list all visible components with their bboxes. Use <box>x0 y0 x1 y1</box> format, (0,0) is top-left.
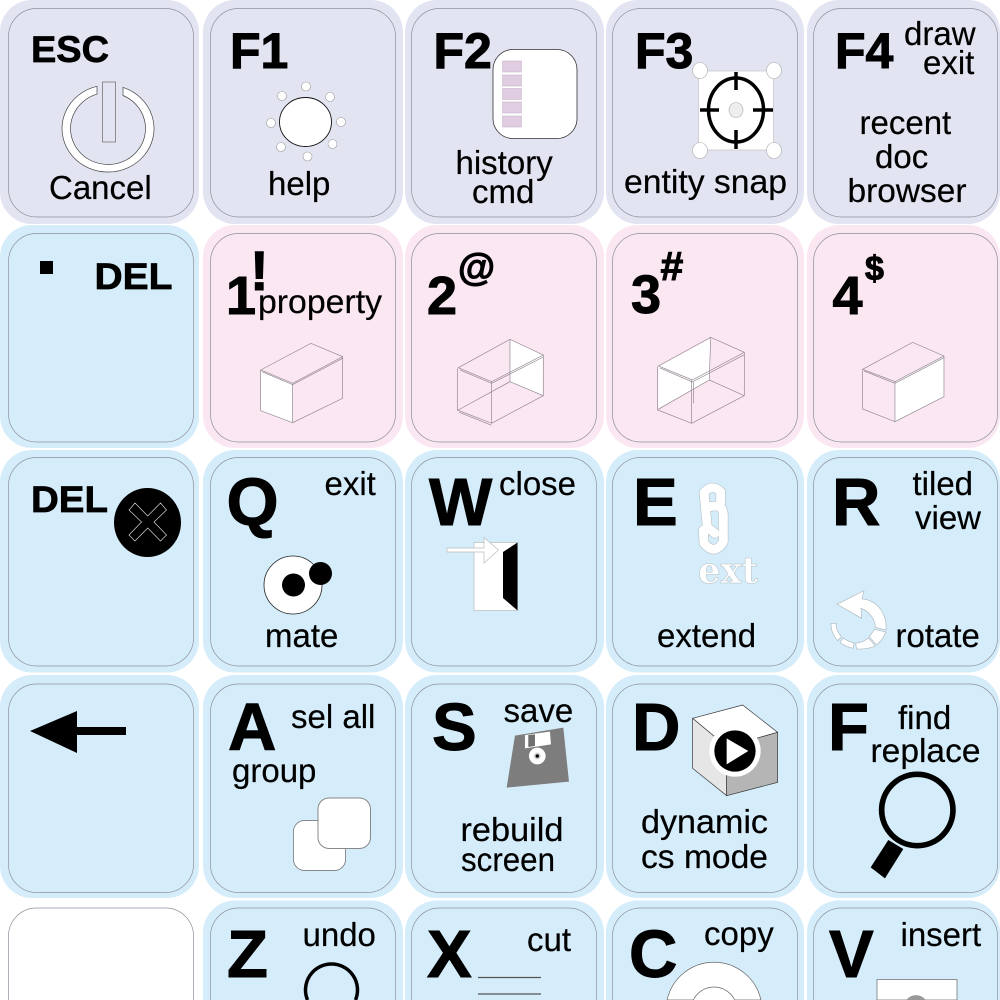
icon: paperclip <box>703 488 723 549</box>
key: C copy <box>606 900 804 1000</box>
label: view: view <box>915 499 981 536</box>
key: 4 dollar <box>807 225 1000 448</box>
icon: solid box, left face <box>261 343 343 423</box>
label: copy: copy <box>704 915 774 952</box>
icon: rotate arrow <box>831 591 886 649</box>
icon: overlapping squares <box>294 798 370 870</box>
key: D dynamic cs mode <box>606 675 804 898</box>
icon: clipboard sheet <box>877 980 957 1000</box>
label: find: find <box>898 699 951 736</box>
label: X: X <box>427 917 472 992</box>
label: exit: exit <box>324 465 376 502</box>
key: backspace <box>0 675 199 898</box>
label: W: W <box>429 465 493 540</box>
key: F2 history cmd <box>405 0 604 224</box>
label: entity snap: entity snap <box>624 163 787 200</box>
key: F find replace <box>807 675 1000 898</box>
label: exclamation mark: ! <box>250 239 269 302</box>
label: dollar: $ <box>865 250 884 288</box>
label: at sign: @ <box>458 247 495 289</box>
label: F2: F2 <box>434 23 492 79</box>
label: DEL: DEL <box>94 255 172 297</box>
label: undo: undo <box>302 916 376 953</box>
icon: wire box, back face <box>457 339 543 425</box>
key: V insert <box>807 900 1000 1000</box>
icon: sun <box>266 82 346 161</box>
icon: wire box, left wall <box>658 337 744 423</box>
label: 2: 2 <box>427 266 457 326</box>
key: E extend <box>606 450 804 672</box>
label: cmd: cmd <box>472 173 534 210</box>
label: insert: insert <box>900 916 981 953</box>
icon: cube with play button <box>693 705 778 796</box>
key: blank white <box>8 908 194 1000</box>
label: V: V <box>829 917 874 992</box>
icon: left arrow <box>30 711 126 753</box>
icon: mate circles <box>264 556 332 614</box>
key: Z undo <box>203 900 403 1000</box>
label: DEL: DEL <box>31 478 108 520</box>
key: R tiled view rotate <box>807 450 1000 672</box>
label: mate: mate <box>265 617 338 654</box>
label: F: F <box>828 690 869 765</box>
icon: compact disc <box>667 962 761 1000</box>
label: help: help <box>268 165 330 202</box>
label: Z: Z <box>227 917 268 992</box>
label: 1: 1 <box>226 266 256 326</box>
icon: history panel <box>493 50 577 138</box>
label: property: property <box>258 283 383 320</box>
label: C: C <box>629 917 677 992</box>
icon: undo circle <box>306 964 358 1000</box>
label: browser: browser <box>848 172 967 209</box>
label: 3: 3 <box>631 265 661 325</box>
label: F3: F3 <box>635 23 693 79</box>
label: Cancel: Cancel <box>49 169 152 206</box>
key: ESC cancel <box>0 0 199 224</box>
key: F1 help <box>203 0 403 224</box>
label: group: group <box>232 752 316 789</box>
label: R: R <box>832 465 880 540</box>
label: F4: F4 <box>835 23 894 79</box>
key: DEL square <box>0 225 199 448</box>
icon: cut lines <box>478 978 541 994</box>
icon: floppy disk <box>507 728 569 788</box>
label: rotate: rotate <box>896 617 980 654</box>
label: rebuild: rebuild <box>460 811 564 848</box>
label: F1: F1 <box>230 23 288 79</box>
key: W close <box>405 450 604 672</box>
label: tiled: tiled <box>912 465 973 502</box>
label: S: S <box>432 690 477 765</box>
label: sel all: sel all <box>291 698 375 735</box>
label: cut: cut <box>527 921 571 958</box>
icon: power symbol <box>62 82 154 172</box>
key: 2 at-sign <box>405 225 604 448</box>
icon: small square <box>40 261 53 274</box>
key: X cut <box>405 900 604 1000</box>
label: ESC: ESC <box>31 28 109 70</box>
label: draw: draw <box>904 15 976 52</box>
key: F4 draw exit <box>807 0 1000 224</box>
label: hash: # <box>660 243 684 289</box>
key: S save rebuild <box>405 675 604 898</box>
icon: solid box, right face <box>863 342 944 422</box>
key: 1 property <box>203 225 403 448</box>
label: exit: exit <box>923 44 974 81</box>
label: A: A <box>228 690 276 765</box>
label: save: save <box>504 692 573 729</box>
key: F3 entity snap <box>606 0 804 224</box>
key: DEL delete <box>0 450 199 672</box>
label: close: close <box>499 465 576 502</box>
label: screen: screen <box>461 841 555 878</box>
icon: delete circle <box>114 488 181 557</box>
label: extend: extend <box>657 617 756 654</box>
label: ext: ext <box>698 550 758 592</box>
icon: door and arrow <box>447 538 518 610</box>
label: E: E <box>633 465 678 540</box>
label: 4: 4 <box>832 266 863 326</box>
icon: snap target <box>692 62 782 158</box>
icon: magnifying glass <box>871 774 953 878</box>
label: recent: recent <box>860 104 951 141</box>
label: history: history <box>456 144 553 181</box>
label: cs mode: cs mode <box>641 838 768 875</box>
label: doc: doc <box>875 138 928 175</box>
key: A select all group <box>203 675 403 898</box>
label: D: D <box>632 690 680 765</box>
key: 3 hash <box>606 225 804 448</box>
label: Q: Q <box>226 465 279 540</box>
label: replace: replace <box>870 732 980 769</box>
label: dynamic: dynamic <box>641 803 768 840</box>
key: Q exit mate <box>203 450 403 672</box>
